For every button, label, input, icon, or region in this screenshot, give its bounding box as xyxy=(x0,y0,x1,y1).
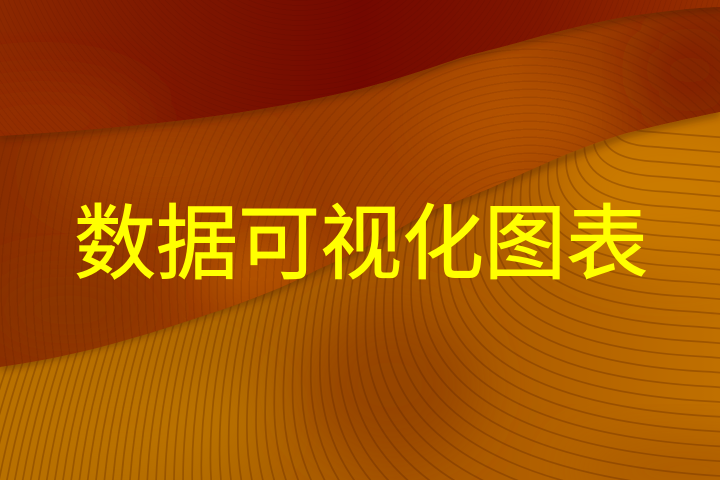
title: 数据可视化图表 xyxy=(74,199,648,290)
band: middle burnt orange xyxy=(0,0,720,370)
texture: middle band arcs xyxy=(0,20,690,366)
band: top dark red xyxy=(0,0,720,136)
band: bottom amber with curved ribs xyxy=(0,112,720,480)
